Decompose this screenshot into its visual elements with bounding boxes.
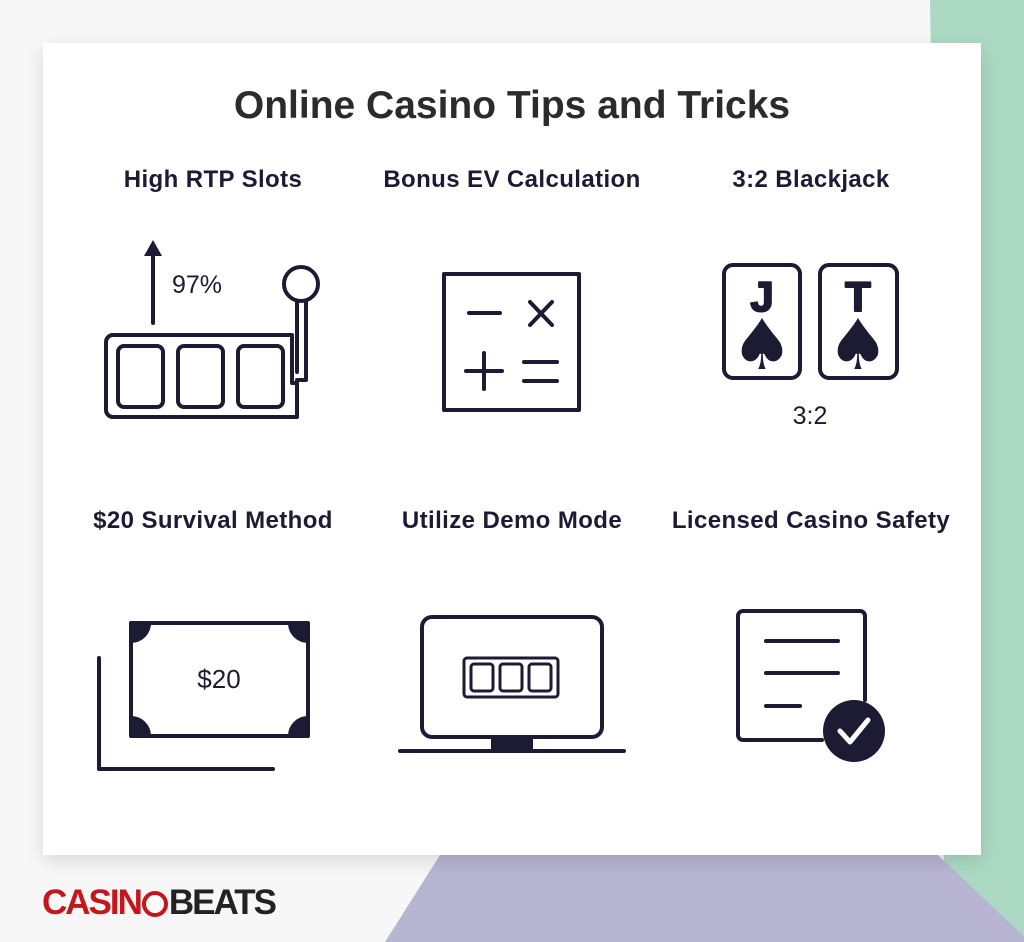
- heading: 3:2 Blackjack: 3:2 Blackjack: [732, 166, 890, 193]
- icon: slot machine: 97%: [172, 271, 222, 299]
- icon: slot machine: [106, 240, 318, 417]
- icon: $20 bill: $20: [197, 664, 241, 694]
- heading: Utilize Demo Mode: Utilize Demo Mode: [402, 507, 622, 534]
- icon: licensed document: [738, 611, 885, 762]
- heading: $20 Survival Method: $20 Survival Method: [93, 507, 333, 534]
- icon: cards: J: [750, 273, 774, 320]
- logo: CasinoBeats: CASIN BEATS: [42, 883, 275, 922]
- heading: Licensed Casino Safety: Licensed Casino Safety: [672, 507, 950, 534]
- heading: High RTP Slots: High RTP Slots: [124, 166, 302, 193]
- icon: cards: 3:2: [793, 402, 827, 430]
- card panel: [43, 43, 981, 855]
- icon: cards: T: [845, 273, 871, 320]
- icon: cards: ♠: [827, 304, 889, 386]
- icon: monitor demo: [400, 617, 624, 751]
- icon: cards: ♠: [731, 304, 793, 386]
- heading: Bonus EV Calculation: Bonus EV Calculation: [383, 166, 641, 193]
- icon: calculator: [444, 274, 579, 410]
- icon: $20 bill: [99, 623, 308, 769]
- icon: cards: [724, 265, 897, 430]
- title: Online Casino Tips and Tricks: [234, 84, 790, 127]
